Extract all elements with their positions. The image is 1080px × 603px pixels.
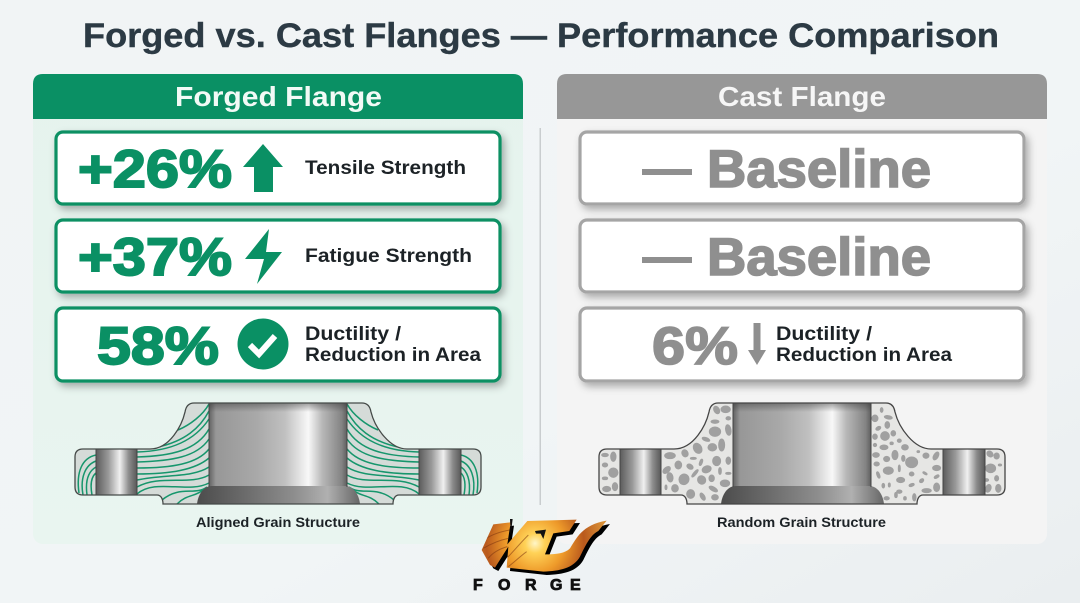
divider — [540, 128, 541, 505]
cast header — [557, 74, 1047, 119]
logo: MTS Forge: FORGE — [473, 577, 581, 594]
card: ductility: 58% — [97, 317, 219, 376]
card: fatigue strength — [56, 220, 500, 292]
title: Forged vs. Cast Flanges — Performance Comparison — [83, 17, 999, 55]
diagram: forged flange cross-section — [75, 403, 481, 504]
panel: cast flange — [557, 74, 1047, 544]
icon: lightning bolt — [245, 229, 282, 284]
card: tensile strength: Tensile Strength — [305, 158, 466, 179]
card: ductility: Reduction in Area — [305, 345, 481, 366]
card: ductility — [56, 308, 500, 381]
card: baseline fatigue — [580, 220, 1024, 292]
card: ductility cast: 6% — [652, 317, 738, 376]
card: tensile strength: +26% — [78, 140, 232, 199]
card: ductility cast: Reduction in Area — [776, 345, 952, 366]
card: ductility cast: Ductility / — [776, 324, 873, 345]
panel: forged flange — [33, 74, 523, 544]
card: ductility cast — [580, 308, 1024, 381]
card: ductility: Ductility / — [305, 324, 402, 345]
icon: up arrow — [243, 144, 283, 192]
caption: random grain: Random Grain Structure — [717, 515, 887, 530]
forged header: Forged Flange — [175, 81, 382, 112]
caption: aligned grain: Aligned Grain Structure — [196, 515, 361, 530]
icon: check circle — [238, 318, 288, 370]
cast header: Cast Flange — [718, 81, 886, 112]
logo: MTS Forge — [473, 519, 610, 594]
icon: down arrow — [748, 323, 766, 365]
forged header — [33, 74, 523, 119]
card: baseline fatigue: Baseline — [707, 228, 931, 287]
card: baseline tensile — [580, 132, 1024, 204]
card: baseline tensile: Baseline — [707, 140, 931, 199]
card: fatigue strength: Fatigue Strength — [305, 246, 472, 267]
card: tensile strength — [56, 132, 500, 204]
diagram: cast flange cross-section — [599, 403, 1005, 504]
card: fatigue strength: +37% — [78, 228, 232, 287]
